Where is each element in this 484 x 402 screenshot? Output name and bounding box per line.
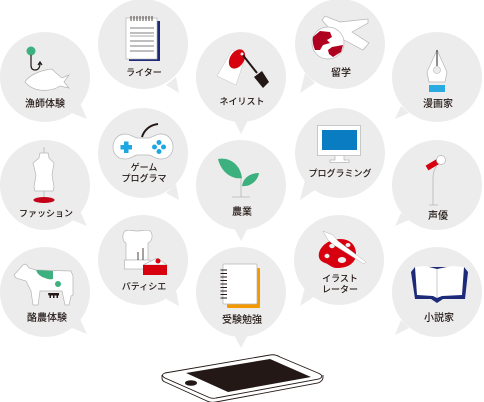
- label: パティシエ: [122, 282, 166, 292]
- label: 漫画家: [423, 97, 453, 110]
- bubble: programming: [295, 108, 385, 200]
- icon: spiral notebook: [220, 264, 260, 308]
- icon: monitor: [318, 126, 360, 162]
- label: ネイリスト: [219, 96, 265, 106]
- bubble: manga artist: [392, 32, 482, 122]
- bubble: study abroad: [295, 0, 385, 93]
- icon: fish hook: [26, 46, 42, 70]
- phone home button: [185, 380, 197, 386]
- bubble: dairy farming: [0, 247, 90, 337]
- icon: nail polish: [217, 46, 269, 88]
- icon: airplane: [322, 16, 369, 50]
- bubble: nail artist: [196, 32, 286, 134]
- bubble: exam study: [196, 247, 286, 348]
- bubble: fishing experience: [0, 32, 90, 122]
- label: プログラミング: [308, 168, 372, 178]
- icon: cow: [14, 264, 73, 305]
- bubble: fashion: [0, 140, 90, 230]
- icon: palette: [319, 231, 366, 268]
- label: 受験勉強: [222, 313, 262, 326]
- label: 農業: [232, 205, 252, 218]
- label: ファッション: [19, 208, 73, 218]
- label: ゲーム: [131, 162, 157, 172]
- label line 2: プログラマ: [121, 172, 167, 184]
- icon: open book: [411, 266, 468, 303]
- icon: microphone: [427, 156, 446, 205]
- icon: notepad: [126, 16, 160, 61]
- icon: smartphone: [162, 355, 323, 402]
- bubble: writer: [98, 0, 188, 93]
- icon: sprout: [218, 159, 259, 197]
- label: 酪農体験: [27, 311, 67, 324]
- bubble: agriculture: [196, 140, 286, 241]
- label: イラスト: [322, 274, 358, 284]
- label line 2: レーター: [322, 284, 358, 294]
- label: 小説家: [424, 311, 454, 324]
- label: 声優: [428, 209, 448, 222]
- icon: chef hat: [123, 230, 152, 269]
- icon: pen nib: [427, 50, 447, 92]
- bubble: game programmer: [98, 108, 188, 200]
- bubble: illustrator: [294, 215, 384, 306]
- label: ライター: [126, 66, 162, 78]
- label: 漁師体験: [25, 97, 65, 110]
- phone screen: [186, 359, 311, 392]
- icon: fish: [25, 69, 69, 90]
- bubble: novelist: [392, 247, 482, 337]
- label: 留学: [331, 66, 351, 79]
- icon: cake: [143, 258, 167, 275]
- bubble: voice actor: [392, 140, 482, 230]
- icon: dress form: [33, 147, 54, 203]
- icon: game controller: [113, 124, 173, 159]
- icon: globe: [312, 27, 344, 59]
- bubble: patissier: [98, 215, 188, 306]
